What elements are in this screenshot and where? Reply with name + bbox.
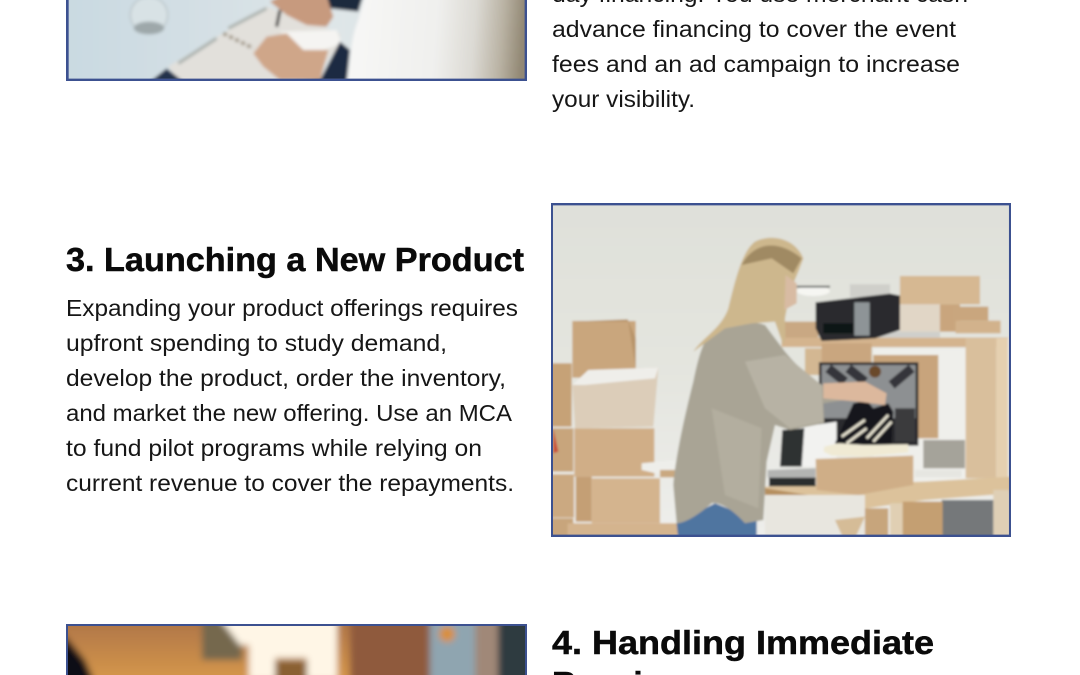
photo: blurred repair shop scene [66, 624, 527, 675]
heading: 3. Launching a New Product: 3. Launching a New Product [66, 241, 524, 278]
top text block: event financing paragraph [552, 0, 968, 112]
text block: launching a new product: and market the new offering. Use an MCA [66, 400, 512, 426]
text block: launching a new product: Expanding your product offerings requires [66, 295, 518, 321]
heading: 4. Handling Immediate Repairs [552, 624, 934, 675]
sneakers [835, 400, 893, 447]
woman: arm and hands [823, 382, 887, 405]
printer [850, 284, 890, 297]
left boxes [572, 321, 636, 378]
text block: launching a new product: to fund pilot programs while relying on [66, 435, 482, 461]
hands [270, 0, 333, 27]
red cord [553, 428, 558, 453]
woman: legs [677, 503, 757, 540]
shirt and background right [347, 0, 530, 83]
woman: shirt [673, 322, 855, 523]
lamp [797, 286, 830, 296]
text block: launching a new product: current revenue to cover the repayments. [66, 470, 514, 496]
top text block: event financing paragraph: advance financing to cover the event [552, 16, 956, 42]
glass [132, 0, 168, 24]
notebook [168, 7, 340, 82]
woman: hair [693, 238, 803, 352]
text block: launching a new product: develop the product, order the inventory, [66, 365, 506, 391]
plastic wrapped box [572, 368, 658, 428]
photo: hands writing in a notebook at a table [63, 0, 530, 83]
sneaker box [816, 456, 913, 495]
top text block: event financing paragraph: fees and an ad campaign to increase [552, 51, 960, 77]
laptop [802, 420, 839, 466]
top text block: event financing paragraph: your visibility. [552, 86, 695, 112]
photo: woman packing sneakers among cardboard boxes [548, 200, 1015, 540]
boxes on shelf [900, 276, 980, 304]
monitor [819, 362, 918, 446]
text block: launching a new product: upfront spending to study demand, [66, 330, 447, 356]
desk [640, 460, 656, 474]
dark suit bits [151, 67, 182, 79]
text block: launching a new product [66, 295, 518, 496]
heading: 4. Handling Immediate Repairs: 4. Handling Immediate [552, 624, 934, 661]
shelf structure [784, 320, 820, 339]
pencil holder [923, 440, 965, 468]
